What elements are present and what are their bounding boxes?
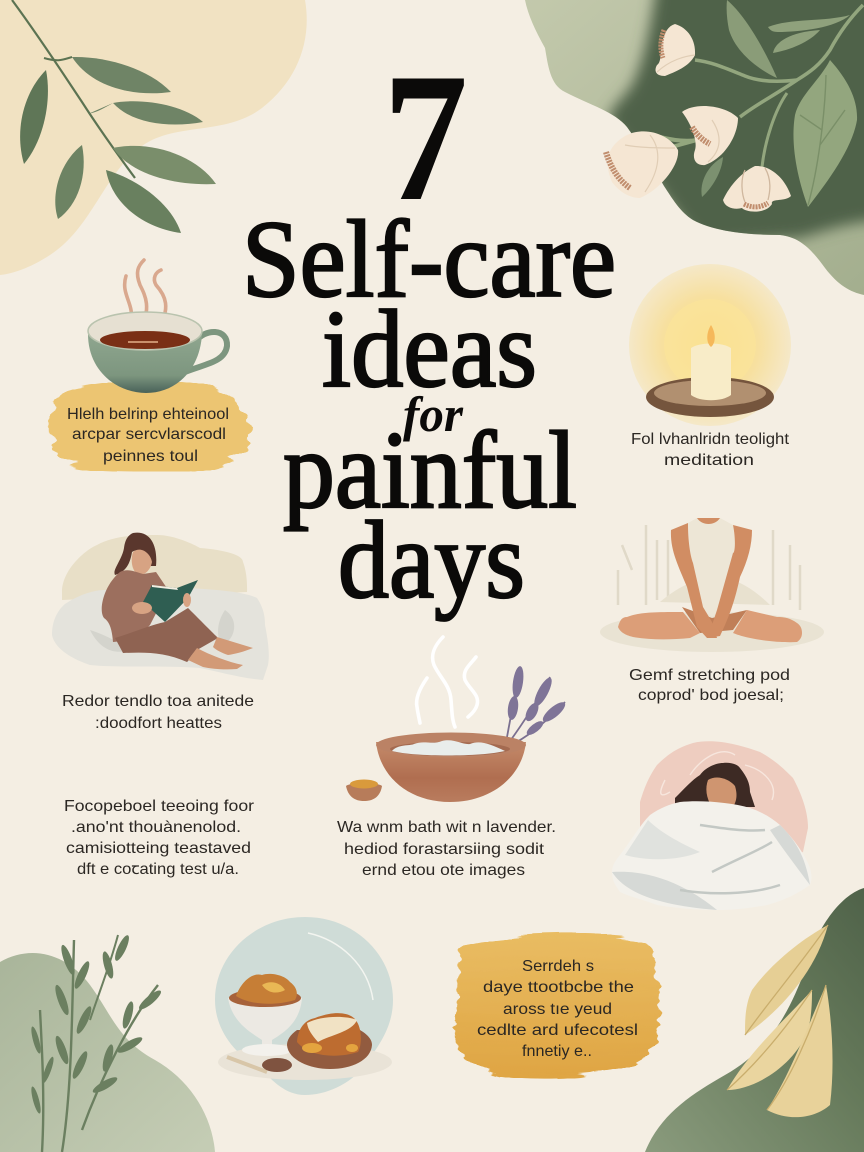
text: stretching: coprod' bod joesal; xyxy=(638,687,784,704)
title: line five: days xyxy=(338,499,525,621)
text: tea: arcpar sercvlarscodl xyxy=(72,426,226,443)
text: lavender bath: Wa wnm bath wit n lavender. xyxy=(337,819,556,836)
icon: sleeping person under blanket xyxy=(612,741,812,910)
text: reading: :doodfort heattes xyxy=(95,715,222,732)
brush: yellow swatch xyxy=(50,381,250,470)
icon: bottom-right yellow leaves xyxy=(727,925,833,1117)
text: nourishing food: camisiotteing teastaved xyxy=(66,840,251,857)
blob: bottom-left green xyxy=(0,953,215,1152)
flower: left xyxy=(606,131,678,198)
card: candle xyxy=(629,264,791,469)
bowl: white xyxy=(228,998,302,1050)
card: reading xyxy=(52,533,269,732)
leaf: small xyxy=(701,157,723,197)
title: line four: painful xyxy=(283,409,577,531)
flower: top xyxy=(656,24,695,76)
text: lavender bath: hediod forastarsiing sodit xyxy=(344,841,545,858)
text: golden brush note xyxy=(477,958,638,1060)
text: nourishing food: Focopeboel teeoing foor xyxy=(64,798,255,815)
title: line two: ideas xyxy=(322,288,537,410)
text: candle xyxy=(631,431,790,469)
text: reading: Redor tendlo toa anitede xyxy=(62,693,254,710)
blob: top-left beige xyxy=(0,0,307,275)
card: lavender bath xyxy=(337,637,568,879)
illustration: top-right flowers and leaves xyxy=(606,0,863,212)
icon: seated stretching figure xyxy=(600,518,824,652)
title: number: 7 xyxy=(383,35,468,239)
text: nourishing food xyxy=(64,798,255,878)
icon: bottom-left herb sprig xyxy=(29,934,163,1152)
leaf: right pair xyxy=(768,15,850,32)
text: nourishing food: dft e coꞇating test u/a. xyxy=(77,861,239,878)
text: golden brush note: fnnetiy e.. xyxy=(522,1043,592,1060)
blob: top-right green xyxy=(520,0,864,300)
icon: person reading xyxy=(52,533,269,680)
leaf: big xyxy=(793,60,857,207)
text: lavender bath xyxy=(337,819,556,879)
title: line three: for xyxy=(403,386,464,442)
dish: brown xyxy=(287,1030,372,1069)
brush: golden swatch xyxy=(454,936,659,1077)
icon: steam xyxy=(125,260,166,330)
flower: middle xyxy=(682,106,738,165)
text: nourishing food: .ano'nt thouànenolod. xyxy=(71,819,241,836)
text: lavender bath: ernd etou ote images xyxy=(362,862,525,879)
icon: food plate in circle xyxy=(215,917,393,1095)
text: stretching: Gemf stretching pod xyxy=(629,667,790,684)
text: golden brush note: aross tıe yeud xyxy=(503,1001,612,1018)
text: tea xyxy=(67,406,229,465)
card: stretching xyxy=(600,518,824,704)
title xyxy=(242,35,616,621)
flower: bottom xyxy=(723,166,791,212)
icon: lavender bath bowl xyxy=(346,637,568,802)
card: golden brush note xyxy=(454,936,659,1077)
leaf: top xyxy=(727,0,777,78)
text: tea: peinnes toul xyxy=(103,448,198,465)
title: line one: Self-care xyxy=(242,198,616,320)
text: candle: meditation xyxy=(664,452,754,469)
text: candle: Fol lvhanlridn teolight xyxy=(631,431,790,448)
text: golden brush note: Serrdeh s xyxy=(522,958,594,975)
text: reading xyxy=(62,693,254,732)
card: tea xyxy=(50,260,250,470)
text: stretching xyxy=(629,667,790,704)
text: golden brush note: cedlte ard ufecotesl xyxy=(477,1022,638,1039)
text: golden brush note: daye ttootbcbe the xyxy=(483,979,634,996)
icon: tea cup xyxy=(88,312,227,393)
illustration: top-left leaf branch xyxy=(12,0,216,233)
blob: bottom-right green xyxy=(645,888,864,1152)
icon: candle with halo xyxy=(629,264,791,426)
text: tea: Hlelh belrinp ehteinool xyxy=(67,406,229,423)
